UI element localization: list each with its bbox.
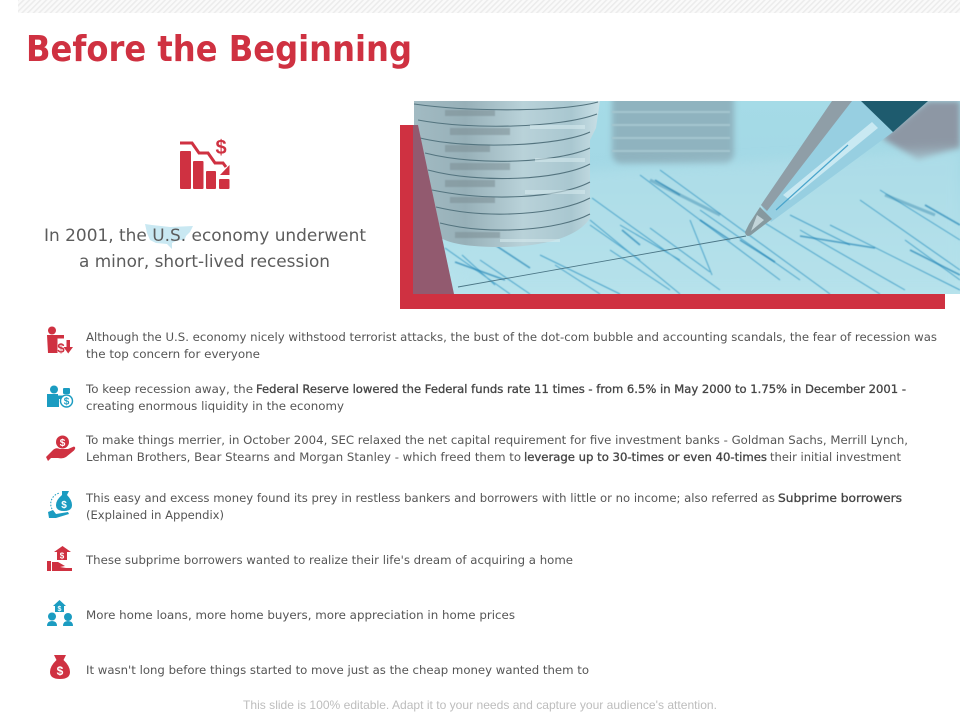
bullet 3 [46,433,908,464]
translucent red overlay on photo [413,125,454,294]
chart lines [445,170,960,294]
footer note: This slide is 100% editable. Adapt it to your needs and capture your audience's attention. [243,698,717,712]
text: More home loans, more home buyers, more appreciation in home prices [86,608,515,622]
blurred rear coins [612,92,734,164]
icon: businessman with dollar down: $ [57,340,65,356]
icon: hand holding coin: $ [60,438,66,449]
icon: hand holding house: $ [60,552,65,560]
bullet 4 [48,491,902,522]
red frame behind photo [400,125,945,309]
text [85,382,906,413]
heading text: a minor, short-lived recession [79,252,330,272]
icon: U.S. map shape [145,224,193,249]
bullet 5 [47,546,573,571]
icon: falling bar chart with dollar: $ [215,137,227,159]
text: It wasn't long before things started to move just as the cheap money wanted them to [86,663,589,677]
icon: falling bar chart with dollar [180,137,230,189]
icon: hand holding coin [46,436,75,461]
text: To keep recession away, the [85,382,253,396]
pale paper highlight [590,146,955,186]
icon: hand releasing money bag: $ [61,500,67,511]
pen trace line [458,236,746,287]
heading text: In 2001, the U.S. economy underwent [44,226,366,246]
icon: businessman with dollar down [47,326,73,356]
text: (Explained in Appendix) [86,508,224,522]
top hatched band [18,0,960,13]
icon: person with case and coin: $ [64,396,70,408]
text: To make things merrier, in October 2004, SEC relaxed the net capital requirement for five investment banks - Goldman Sachs, Merrill Lynch, [85,433,908,447]
pen [761,101,893,222]
icon: two buyers and house [47,600,73,626]
text: creating enormous liquidity in the economy [86,399,344,413]
photo: coins and pen on chart [408,92,960,294]
bullet 2 [47,382,906,413]
icon: hand releasing money bag [48,491,72,518]
text: Subprime borrowers [778,491,902,505]
icon: person with case and coin [47,386,72,408]
text: Lehman Brothers, Bear Stearns and Morgan Stanley - which freed them to [86,450,521,464]
bullet 6 [47,600,515,626]
text: Federal Reserve lowered the Federal funds rate 11 times - from 6.5% in May 2000 to 1.75% in December 2001 - [256,382,906,396]
bullet 1 [47,326,937,361]
text: These subprime borrowers wanted to realize their life's dream of acquiring a home [85,553,573,567]
icon: two buyers and house: $ [58,606,62,613]
text: the top concern for everyone [86,347,260,361]
text: leverage up to 30-times or even 40-times [524,450,767,464]
text [86,330,937,361]
text: Although the U.S. economy nicely withstood terrorist attacks, the bust of the dot-com bubble and accounting scandals, the fear of recession was [86,330,937,344]
icon: money bag: $ [57,664,64,678]
text [85,433,908,464]
heading text [44,226,366,272]
text: their initial investment [770,450,901,464]
icon: hand holding house [47,546,72,571]
front coin stack [408,101,600,247]
text: This easy and excess money found its prey in restless bankers and borrowers with little or no income; also referred as [85,491,775,505]
title: Before the Beginning [26,29,412,70]
bullet 7 [50,655,589,679]
text [85,491,902,522]
icon: money bag [50,655,70,679]
soft top-right object [882,101,960,160]
